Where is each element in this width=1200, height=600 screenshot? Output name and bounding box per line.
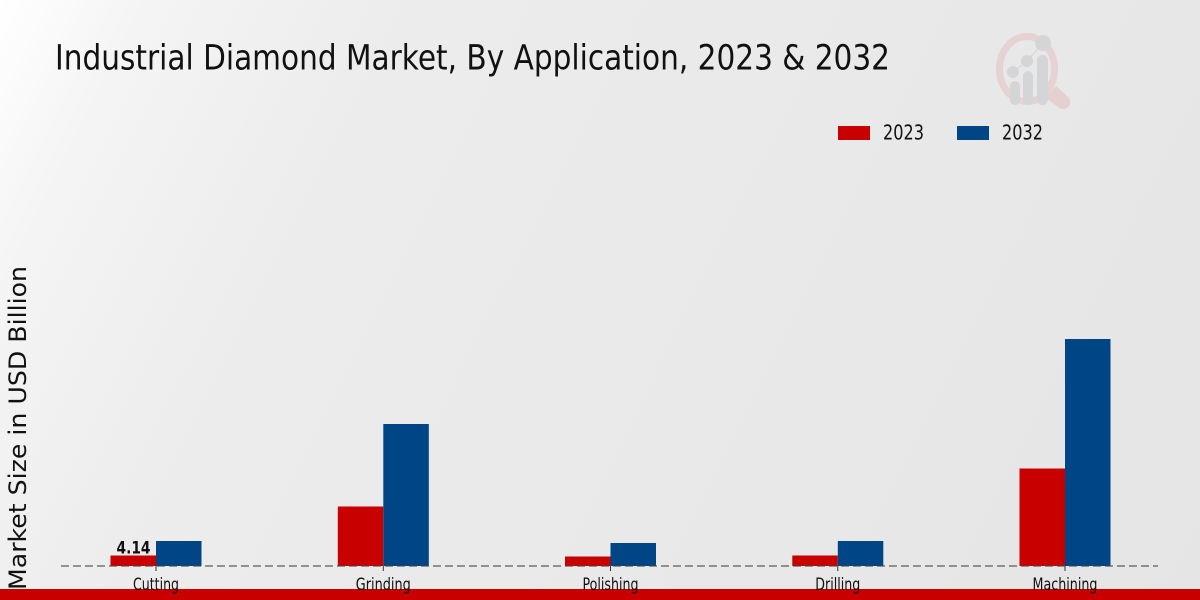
group: Machining bbox=[1020, 339, 1110, 595]
legend: 2023 bbox=[838, 120, 924, 144]
legend: 2023: 2023 bbox=[883, 120, 924, 144]
value label: 4.14 bbox=[116, 538, 150, 558]
group: Polishing bbox=[565, 543, 656, 595]
group: Machining: Machining bbox=[1032, 575, 1098, 595]
legend bbox=[838, 120, 1043, 144]
group: Drilling: Drilling bbox=[815, 575, 860, 595]
legend: 2032: 2032 bbox=[1002, 120, 1043, 144]
title: Industrial Diamond Market, By Application, 2023 & 2032 bbox=[55, 38, 890, 78]
y axis label: Market Size in USD Billion bbox=[4, 266, 32, 590]
group: Grinding: Grinding bbox=[356, 575, 411, 595]
baseline bbox=[61, 565, 1158, 567]
bar chart bbox=[61, 339, 1158, 595]
bottom red band bbox=[0, 589, 1200, 600]
group: Cutting: Cutting bbox=[133, 575, 179, 595]
group: Cutting bbox=[110, 538, 202, 595]
icon: watermark logo bbox=[1000, 35, 1070, 109]
group: Polishing: Polishing bbox=[582, 575, 638, 595]
group: Drilling bbox=[792, 541, 883, 595]
group: Grinding bbox=[338, 424, 429, 595]
legend: 2032 bbox=[957, 120, 1043, 144]
